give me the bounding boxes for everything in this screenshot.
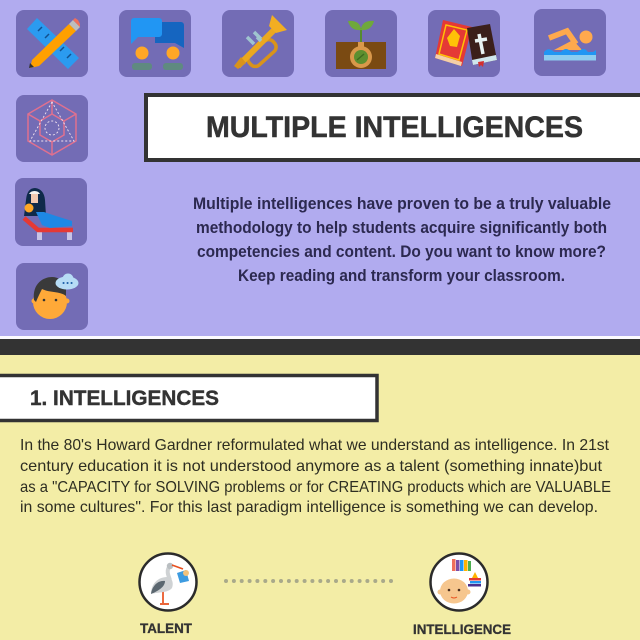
icon: baby with toys — [430, 554, 488, 610]
text block: introduction: Multiple intelligences have proven to be a truly valuable — [193, 195, 611, 213]
panel: purple header background — [0, 0, 640, 336]
text block: definition: in some cultures". For this last paradigm intelligence is something we can develop. — [20, 499, 598, 516]
text block: introduction — [193, 195, 611, 285]
section heading box: 1. INTELLIGENCES — [30, 387, 219, 410]
icon: sprouting seed — [325, 10, 397, 77]
icon: stork carrying baby — [140, 554, 196, 610]
text block: definition: century education it is not understood anymore as a talent (something innate)but — [20, 458, 603, 475]
label: talent: TALENT — [140, 620, 192, 636]
text block: introduction: Keep reading and transform your classroom. — [238, 267, 565, 285]
icon: geometric hexagon — [16, 95, 88, 162]
icon: two people talking — [119, 10, 191, 77]
text block: introduction: methodology to help students acquire significantly both — [196, 219, 607, 237]
panel: yellow section background — [0, 355, 640, 640]
title box — [146, 95, 640, 160]
icon: swimmer — [534, 9, 606, 76]
text block: introduction: competencies and content. Do you want to know more? — [197, 243, 606, 261]
dark divider band — [0, 339, 640, 355]
text block: definition — [20, 437, 611, 516]
icon: person on therapist couch — [15, 178, 87, 246]
label: intelligence: INTELLIGENCE — [413, 621, 511, 637]
icon: sacred books — [428, 10, 500, 77]
section heading box — [0, 376, 377, 420]
icon: ruler and pencil — [16, 10, 88, 77]
icon: trumpet — [222, 10, 294, 77]
dotted connector — [224, 579, 393, 583]
text block: definition: In the 80's Howard Gardner reformulated what we understand as intelligence. In 21st — [20, 437, 610, 454]
title box: MULTIPLE INTELLIGENCES — [206, 111, 583, 144]
icon: thinking head — [16, 263, 88, 330]
text block: definition: as a "CAPACITY for SOLVING problems or for CREATING products which are VALUABLE — [20, 479, 611, 496]
